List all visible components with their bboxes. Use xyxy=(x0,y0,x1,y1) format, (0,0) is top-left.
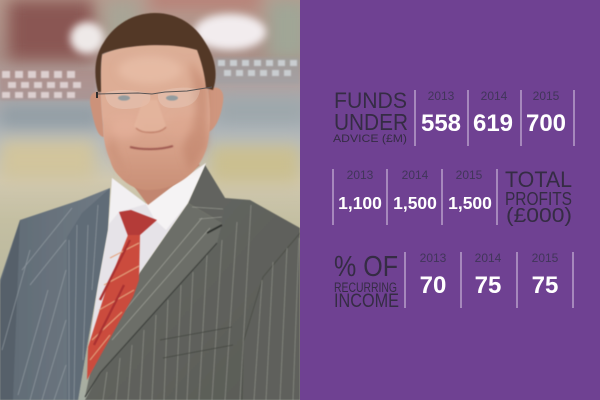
panel: portrait photo xyxy=(0,0,308,400)
years: 2013 xyxy=(420,251,447,265)
values: 1,500 xyxy=(448,193,492,213)
heading: total profits xyxy=(505,167,572,227)
years: 2013 xyxy=(347,168,374,182)
face xyxy=(101,44,210,190)
row: recurring income xyxy=(334,251,573,312)
row: total profits xyxy=(333,167,572,227)
nose and mouth xyxy=(129,113,174,151)
heading: total profits: PROFITS xyxy=(505,189,572,209)
values xyxy=(421,110,566,137)
left lapel xyxy=(67,188,110,400)
photo background xyxy=(0,0,308,400)
hair xyxy=(95,13,216,92)
jacket xyxy=(0,165,300,400)
values: 700 xyxy=(526,110,566,137)
heading: percent of recurring income xyxy=(334,251,399,312)
heading: percent of recurring income: INCOME xyxy=(334,291,399,312)
left sleeve xyxy=(0,220,20,400)
years xyxy=(428,89,560,103)
neck xyxy=(134,164,200,206)
heading: funds under advice xyxy=(333,88,408,145)
values: 619 xyxy=(473,110,513,137)
values: 75 xyxy=(475,272,501,299)
heading: total profits: TOTAL xyxy=(505,167,572,192)
heading: total profits: (£000) xyxy=(506,205,572,227)
values: 1,500 xyxy=(393,193,437,213)
years: 2014 xyxy=(402,168,429,182)
years xyxy=(347,168,483,182)
heading: funds under advice: ADVICE (£M) xyxy=(333,133,407,145)
tie xyxy=(87,210,157,380)
years: 2015 xyxy=(456,168,483,182)
values: 558 xyxy=(421,110,461,137)
values: 70 xyxy=(420,272,446,299)
heading: percent of recurring income: % OF xyxy=(334,251,398,283)
values xyxy=(420,272,558,299)
values: 75 xyxy=(532,272,558,299)
values xyxy=(338,193,492,213)
heading: funds under advice: UNDER xyxy=(334,109,408,135)
years xyxy=(420,251,559,265)
row: funds under advice xyxy=(333,88,574,146)
heading: funds under advice: FUNDS xyxy=(334,88,407,113)
heading: percent of recurring income: RECURRING xyxy=(334,280,397,295)
right sleeve xyxy=(242,233,300,400)
pocket xyxy=(160,327,233,358)
years: 2013 xyxy=(428,89,455,103)
panel: purple stats background xyxy=(300,0,600,400)
years: 2015 xyxy=(533,89,560,103)
right lapel xyxy=(85,203,222,397)
years: 2015 xyxy=(532,251,559,265)
shirt collar xyxy=(88,163,206,350)
ears xyxy=(90,88,223,137)
face shading xyxy=(108,56,208,175)
years: 2014 xyxy=(475,251,502,265)
years: 2014 xyxy=(481,89,508,103)
values: 1,100 xyxy=(338,193,382,213)
glasses and eyes xyxy=(97,87,212,109)
